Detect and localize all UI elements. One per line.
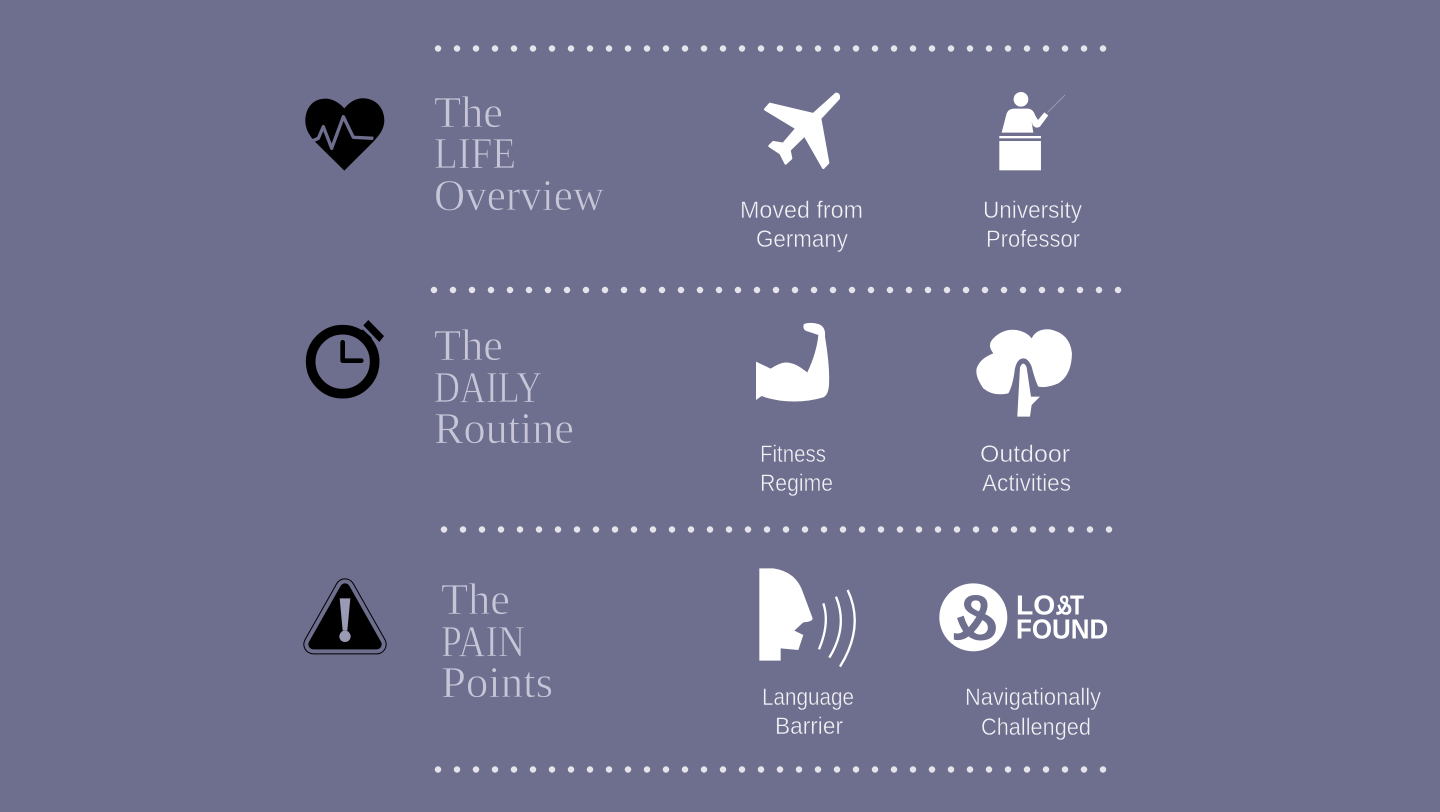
label: Fitness Regime	[760, 441, 833, 497]
heading: The PAIN Points	[441, 575, 553, 707]
heading: The PAIN Points: Points	[441, 658, 553, 707]
label: University Professor	[983, 197, 1082, 253]
icon: warning triangle	[313, 588, 377, 644]
label: Fitness Regime: Regime	[760, 470, 833, 497]
label: Navigationally Challenged: Navigationally	[965, 684, 1101, 711]
icon: heart with pulse	[305, 98, 384, 171]
icon: Lost and Found logo: &	[1056, 591, 1072, 621]
icon: stopwatch	[311, 320, 384, 394]
label: Outdoor Activities: Outdoor	[980, 441, 1070, 468]
heading: The LIFE Overview: Overview	[434, 171, 604, 220]
label: University Professor: Professor	[986, 226, 1080, 253]
panel: pain points	[313, 568, 1108, 741]
icon: professor at podium	[999, 92, 1065, 170]
label: Outdoor Activities: Activities	[982, 470, 1071, 497]
label: Outdoor Activities	[980, 441, 1071, 497]
icon: Lost and Found logo: T	[1070, 589, 1084, 620]
icon: Lost and Found logo: FOUND	[1016, 613, 1108, 644]
icon: Lost and Found logo	[939, 581, 1108, 654]
heading: The LIFE Overview	[434, 88, 604, 220]
icon: Lost and Found logo: &	[952, 581, 999, 654]
label: Language Barrier: Barrier	[775, 713, 843, 740]
icon: tree	[976, 329, 1072, 417]
icon: speaking head	[759, 568, 855, 667]
icon: flexed bicep	[756, 323, 829, 401]
heading: The PAIN Points: The	[441, 575, 510, 624]
label: Moved from Germany: Germany	[756, 226, 848, 253]
heading: The DAILY Routine: DAILY	[434, 363, 542, 412]
icon: Lost and Found logo: LO	[1016, 589, 1055, 620]
label: Language Barrier	[762, 684, 854, 740]
label: Moved from Germany: Moved from	[740, 197, 863, 224]
label: Moved from Germany	[740, 197, 863, 253]
label: Language Barrier: Language	[762, 684, 854, 711]
label: Navigationally Challenged: Challenged	[981, 714, 1091, 741]
heading: The DAILY Routine	[434, 321, 574, 453]
icon: airplane	[765, 94, 839, 168]
heading: The PAIN Points: PAIN	[441, 617, 525, 666]
label: University Professor: University	[983, 197, 1082, 224]
heading: The LIFE Overview: The	[434, 88, 503, 137]
heading: The DAILY Routine: Routine	[434, 404, 574, 453]
heading: The LIFE Overview: LIFE	[434, 129, 516, 178]
label: Navigationally Challenged	[965, 684, 1101, 741]
label: Fitness Regime: Fitness	[760, 441, 826, 468]
panel: daily routine	[311, 320, 1072, 497]
panel: life overview	[305, 88, 1082, 253]
heading: The DAILY Routine: The	[434, 321, 503, 370]
